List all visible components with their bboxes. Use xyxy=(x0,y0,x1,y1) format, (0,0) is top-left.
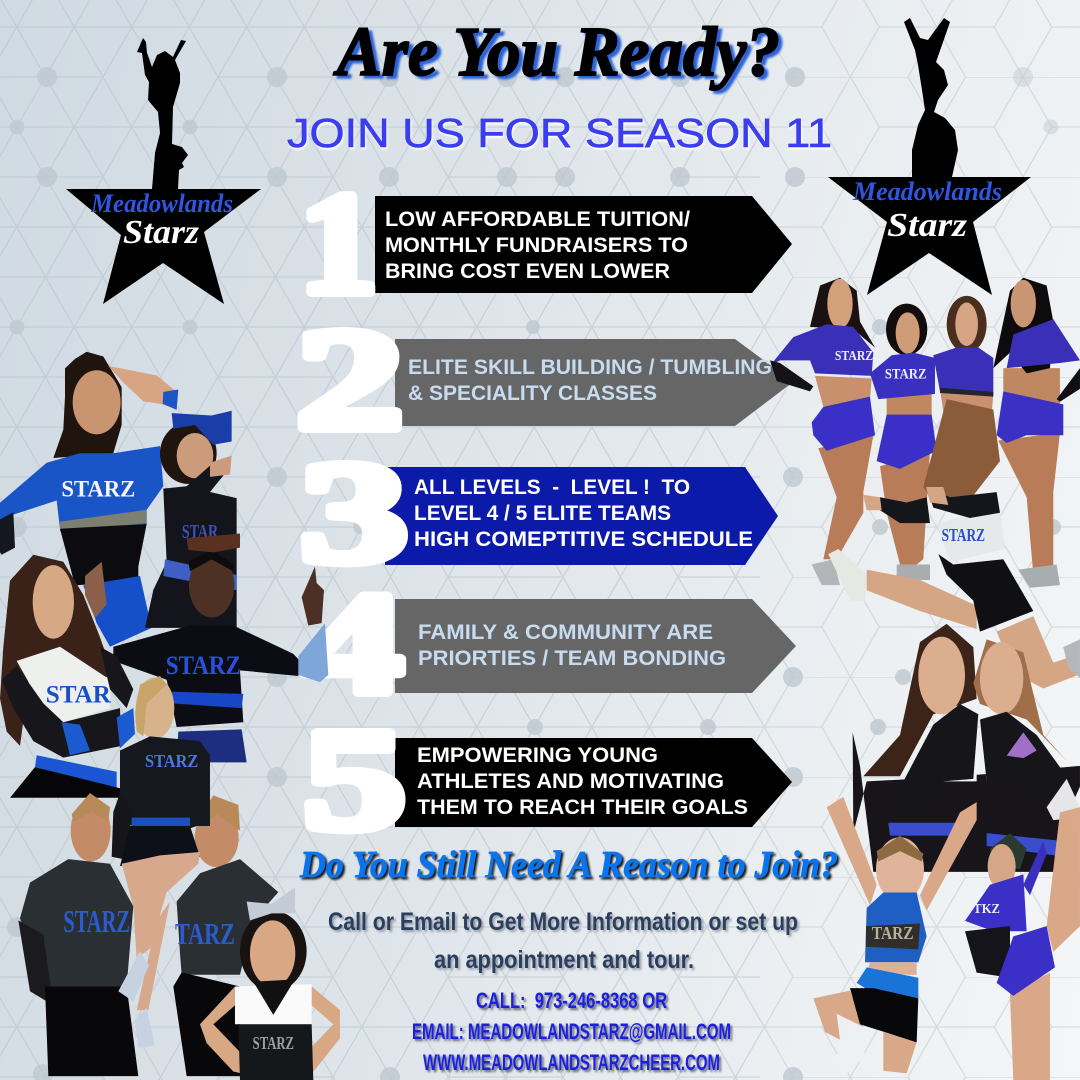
arrow 5 xyxy=(395,738,792,827)
cheerleader: girl 3 xyxy=(933,296,993,435)
arrow 4: PRIORTIES / TEAM BONDING xyxy=(418,647,726,670)
cheerleader: guy left: STARZ xyxy=(63,905,130,940)
cheerleader: blonde flyer xyxy=(112,676,210,1048)
call to action line 2: an appointment and tour. xyxy=(434,946,694,974)
cheerleader: girl 1: STARZ xyxy=(835,349,873,363)
logo: left star xyxy=(66,38,261,304)
number 2: 2 xyxy=(296,300,404,460)
cheerleader: brown hair girl: STAR xyxy=(46,679,112,708)
arrow 1 xyxy=(375,196,792,293)
arrow 3 xyxy=(385,467,778,565)
cheerleaders: pair back to back xyxy=(853,624,1080,931)
cheerleader: little girl arms up xyxy=(813,797,977,1073)
contact: website: WWW.MEADOWLANDSTARZCHEER.COM xyxy=(423,1050,720,1075)
cheerleader: center girl with black top xyxy=(85,533,328,762)
question banner: Do You Still Need A Reason to Join? xyxy=(299,844,838,886)
cheerleader: little girl with bow: STAR xyxy=(182,521,219,543)
arrow 2: & SPECIALITY CLASSES xyxy=(408,382,657,405)
cheerleader: little girl with silver bow: STARZ xyxy=(253,1034,294,1053)
cheerleader: girl 4 far right xyxy=(993,278,1080,588)
logo: right star: Meadowlands xyxy=(852,177,1002,206)
number 5: 5 xyxy=(303,700,406,860)
cheerleader: jumper xyxy=(828,399,1080,688)
logo: right star xyxy=(828,18,1031,295)
arrow 5: EMPOWERING YOUNG xyxy=(417,744,658,767)
arrow 1: LOW AFFORDABLE TUITION/ xyxy=(385,208,690,231)
arrow 3: LEVEL 4 / 5 ELITE TEAMS xyxy=(414,502,671,525)
cheerleader: girl 2: STARZ xyxy=(885,365,926,382)
arrow 1: BRING COST EVEN LOWER xyxy=(385,260,670,283)
logo: right star: Starz xyxy=(887,207,968,244)
cheerleader: blue top girl xyxy=(0,352,178,647)
cheerleader: little girl with bow xyxy=(145,411,237,628)
number 1: 1 xyxy=(299,164,378,324)
call to action line 1: Call or Email to Get More Information or set up xyxy=(328,908,798,936)
cheerleader: blonde flyer: STARZ xyxy=(145,752,198,772)
contact: phone: CALL: 973-246-8368 OR xyxy=(476,988,667,1013)
photo collage: left cheerleaders xyxy=(0,352,340,1080)
arrow 5: THEM TO REACH THEIR GOALS xyxy=(417,796,748,819)
arrow 4: FAMILY & COMMUNITY ARE xyxy=(418,621,713,644)
cheerleader: blue top girl: STARZ xyxy=(61,477,135,502)
logo: left star: Meadowlands xyxy=(90,189,233,218)
cheerleader: girl 1 xyxy=(770,278,875,585)
cheerleader: little girl arms up: TARZ xyxy=(872,925,914,944)
arrow 3: HIGH COMEPTITIVE SCHEDULE xyxy=(414,528,753,551)
cheerleader: guy right: TARZ xyxy=(175,916,235,951)
arrow 3: ALL LEVELS - LEVEL ! TO xyxy=(414,476,690,499)
cheerleader: center girl with black top: STARZ xyxy=(166,651,241,680)
arrow 2 xyxy=(395,339,793,426)
contact: email: EMAIL: MEADOWLANDSTARZ@GMAIL.COM xyxy=(412,1019,731,1044)
cheerleader: scorpion pose: TKZ xyxy=(973,902,1000,917)
cheerleader: jumper: STARZ xyxy=(942,527,985,546)
cheerleader: guy left xyxy=(18,793,138,1076)
arrow 5: ATHLETES AND MOTIVATING xyxy=(417,770,724,793)
subtitle: JOIN US FOR SEASON 11 xyxy=(287,110,832,156)
title: Are You Ready? xyxy=(333,14,780,91)
arrow 2: ELITE SKILL BUILDING / TUMBLING xyxy=(408,356,772,379)
number 3: 3 xyxy=(300,433,408,593)
cheerleader: guy right xyxy=(173,795,278,1076)
arrow 4 xyxy=(395,599,796,693)
cheerleader: girl 2 xyxy=(870,304,937,580)
cheerleader: scorpion pose xyxy=(965,833,1080,1080)
photo collage: right cheerleaders xyxy=(770,278,1080,1080)
logo: left star: Starz xyxy=(123,214,200,251)
arrow 1: MONTHLY FUNDRAISERS TO xyxy=(385,234,688,257)
cheerleader: little girl with silver bow xyxy=(200,887,340,1080)
cheerleader: brown hair girl xyxy=(0,555,135,798)
number 4: 4 xyxy=(302,564,403,724)
